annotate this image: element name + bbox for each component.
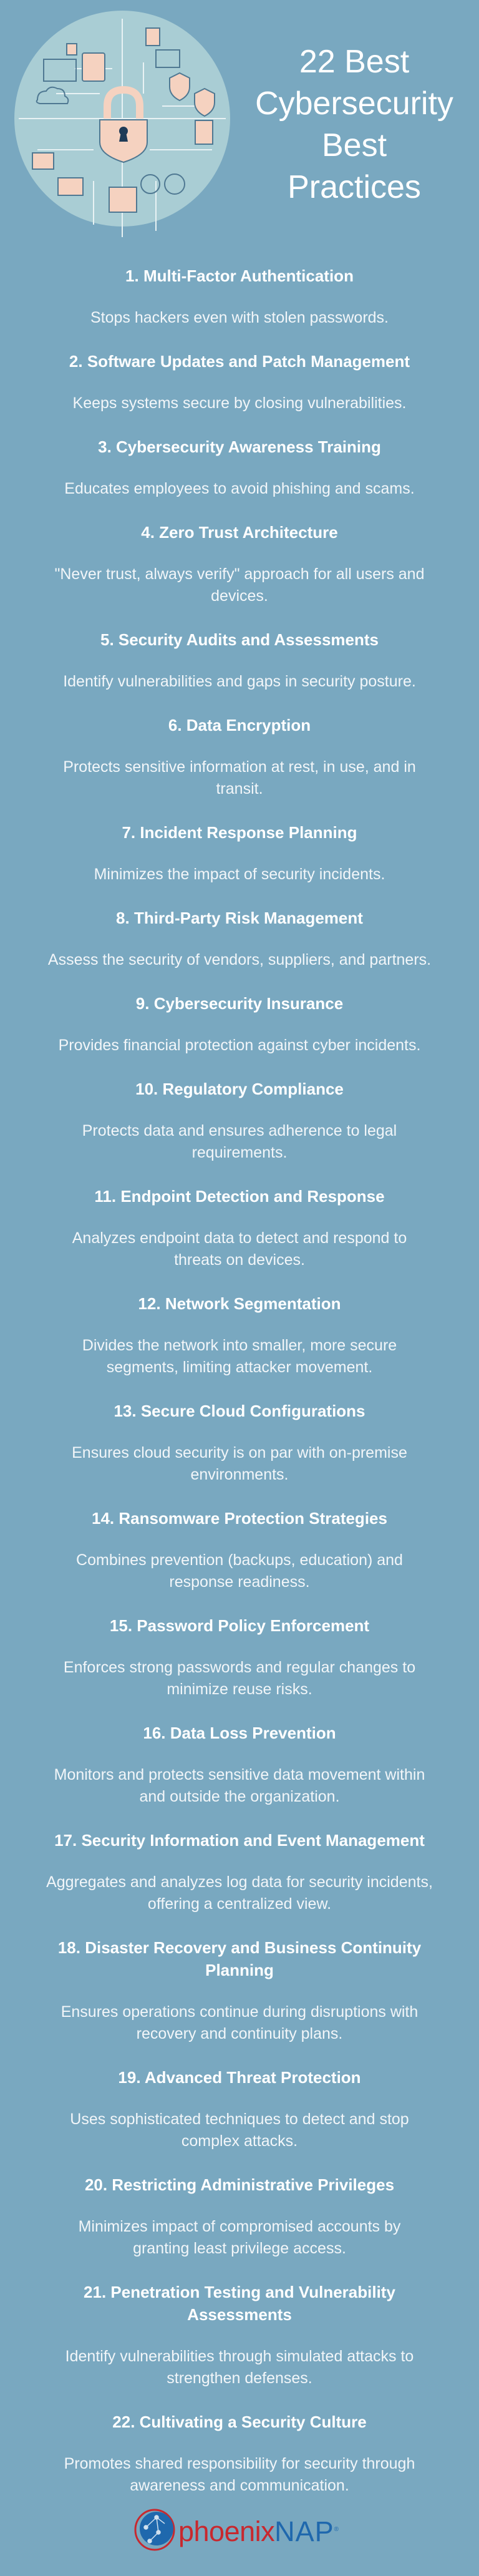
item 16: 16. Data Loss Prevention bbox=[143, 1724, 336, 1742]
item 18: Ensures operations continue during disruptions with bbox=[61, 2003, 418, 2021]
item 2: 2. Software Updates and Patch Management bbox=[69, 352, 410, 371]
item 15: 15. Password Policy Enforcement bbox=[110, 1616, 369, 1635]
item 21: Identify vulnerabilities through simulated attacks to bbox=[65, 2348, 414, 2365]
item 13: environments. bbox=[190, 1466, 289, 1483]
item 19: complex attacks. bbox=[181, 2132, 298, 2150]
item 13 bbox=[72, 1402, 407, 1483]
title bbox=[255, 44, 453, 205]
item 16: and outside the organization. bbox=[139, 1788, 340, 1805]
item 15: Enforces strong passwords and regular changes to bbox=[64, 1659, 415, 1676]
item 14: 14. Ransomware Protection Strategies bbox=[92, 1509, 387, 1528]
icon: globe bbox=[135, 2509, 175, 2551]
item 22 bbox=[64, 2413, 415, 2494]
item 15: minimize reuse risks. bbox=[167, 1681, 312, 1698]
item 22: Promotes shared responsibility for security through bbox=[64, 2455, 415, 2472]
item 6: 6. Data Encryption bbox=[168, 716, 311, 734]
item 13: 13. Secure Cloud Configurations bbox=[114, 1402, 365, 1420]
item 18: Planning bbox=[205, 1961, 274, 1979]
item 4: "Never trust, always verify" approach for all users and bbox=[55, 565, 424, 583]
item 20 bbox=[79, 2175, 400, 2257]
item 9: 9. Cybersecurity Insurance bbox=[136, 994, 343, 1013]
item 10: Protects data and ensures adherence to legal bbox=[82, 1122, 397, 1139]
item 11: Analyzes endpoint data to detect and respond to bbox=[72, 1229, 407, 1247]
item 9: Provides financial protection against cyber incidents. bbox=[59, 1037, 420, 1054]
item 7 bbox=[94, 823, 385, 883]
item 12: segments, limiting attacker movement. bbox=[107, 1359, 372, 1376]
item 9 bbox=[59, 994, 420, 1054]
item 10: 10. Regulatory Compliance bbox=[135, 1080, 344, 1098]
item 18: recovery and continuity plans. bbox=[137, 2025, 342, 2042]
item 14: response readiness. bbox=[169, 1573, 310, 1591]
item 5 bbox=[63, 630, 416, 690]
item 18 bbox=[58, 1938, 421, 2042]
item 20: Minimizes impact of compromised accounts by bbox=[79, 2218, 400, 2235]
item 12: Divides the network into smaller, more secure bbox=[82, 1337, 397, 1354]
item 12: 12. Network Segmentation bbox=[138, 1294, 341, 1313]
item 7: 7. Incident Response Planning bbox=[122, 823, 357, 842]
item 19: 19. Advanced Threat Protection bbox=[118, 2068, 361, 2087]
item 1: Stops hackers even with stolen passwords. bbox=[90, 309, 389, 326]
item 17: 17. Security Information and Event Management bbox=[54, 1831, 425, 1850]
title: Best bbox=[322, 127, 387, 163]
item 21 bbox=[65, 2283, 414, 2387]
item 4: devices. bbox=[211, 587, 268, 605]
header bbox=[14, 11, 453, 237]
item 7: Minimizes the impact of security incidents. bbox=[94, 866, 385, 883]
item 11 bbox=[72, 1187, 407, 1269]
item 17: Aggregates and analyzes log data for security incidents, bbox=[46, 1873, 433, 1891]
item 12 bbox=[82, 1294, 397, 1376]
item 11: 11. Endpoint Detection and Response bbox=[94, 1187, 385, 1206]
logo: phoenixNAP bbox=[135, 2509, 339, 2551]
item 15 bbox=[64, 1616, 415, 1698]
item 21: 21. Penetration Testing and Vulnerability bbox=[84, 2283, 395, 2301]
item 6 bbox=[63, 716, 416, 798]
title: Practices bbox=[288, 169, 421, 205]
item 17 bbox=[46, 1831, 433, 1913]
item 20: 20. Restricting Administrative Privileges bbox=[85, 2175, 394, 2194]
item 6: Protects sensitive information at rest, in use, and in bbox=[63, 758, 416, 776]
item 16 bbox=[54, 1724, 425, 1805]
item 17: offering a centralized view. bbox=[148, 1895, 331, 1913]
item 22: 22. Cultivating a Security Culture bbox=[112, 2413, 367, 2431]
item 11: threats on devices. bbox=[174, 1251, 305, 1269]
item 13: Ensures cloud security is on par with on-premise bbox=[72, 1444, 407, 1461]
item 3: Educates employees to avoid phishing and scams. bbox=[64, 480, 415, 497]
item 4 bbox=[55, 523, 424, 605]
item 3: 3. Cybersecurity Awareness Training bbox=[98, 437, 381, 456]
illustration: cybersecurity circle bbox=[14, 11, 230, 237]
title: 22 Best bbox=[299, 44, 409, 80]
item 14 bbox=[76, 1509, 403, 1591]
item 20: granting least privilege access. bbox=[133, 2240, 346, 2257]
item 21: Assessments bbox=[187, 2305, 292, 2324]
padlock bbox=[100, 90, 147, 162]
item 5: 5. Security Audits and Assessments bbox=[100, 630, 379, 649]
wordmark: phoenixNAP® bbox=[178, 2515, 339, 2547]
item 2: Keeps systems secure by closing vulnerabilities. bbox=[73, 394, 406, 412]
item 8: 8. Third-Party Risk Management bbox=[116, 909, 363, 927]
item 21: strengthen defenses. bbox=[167, 2369, 312, 2387]
item 16: Monitors and protects sensitive data movement within bbox=[54, 1766, 425, 1783]
item 19 bbox=[70, 2068, 409, 2150]
item 3 bbox=[64, 437, 415, 497]
item 8 bbox=[48, 909, 431, 968]
item 10: requirements. bbox=[192, 1144, 287, 1161]
item 8: Assess the security of vendors, suppliers, and partners. bbox=[48, 951, 431, 968]
item 1: 1. Multi-Factor Authentication bbox=[125, 266, 354, 285]
title: Cybersecurity bbox=[255, 85, 453, 122]
item 4: 4. Zero Trust Architecture bbox=[141, 523, 338, 542]
item 6: transit. bbox=[216, 780, 263, 798]
item 2 bbox=[69, 352, 410, 412]
item 18: 18. Disaster Recovery and Business Continuity bbox=[58, 1938, 421, 1957]
item 19: Uses sophisticated techniques to detect and stop bbox=[70, 2110, 409, 2128]
item 22: awareness and communication. bbox=[130, 2477, 349, 2494]
item 1 bbox=[90, 266, 389, 326]
item 10 bbox=[82, 1080, 397, 1161]
item 5: Identify vulnerabilities and gaps in security posture. bbox=[63, 673, 416, 690]
item 14: Combines prevention (backups, education) and bbox=[76, 1551, 403, 1569]
